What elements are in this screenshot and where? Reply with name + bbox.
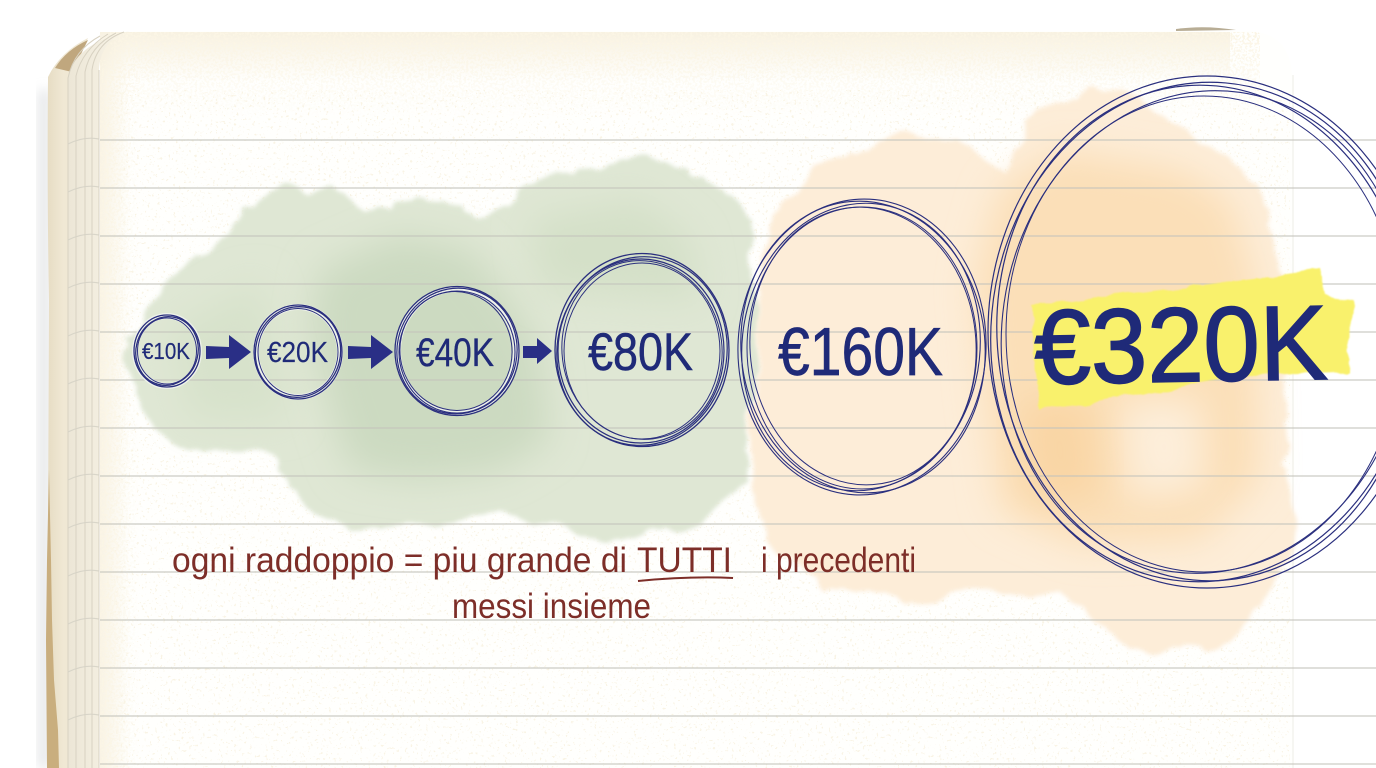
value: €40K	[416, 331, 494, 375]
circle: 160K	[728, 191, 997, 503]
top edge sliver	[1176, 27, 1236, 31]
value: €20K	[267, 337, 329, 369]
circle: 80K	[545, 246, 739, 456]
green wash	[128, 156, 762, 540]
stacked page edges	[68, 31, 130, 768]
orange wash	[748, 88, 1290, 658]
caption line 2: messi insieme	[452, 587, 651, 626]
arrow 3	[523, 338, 552, 364]
watercolor washes	[128, 88, 1290, 658]
circle: 10K	[129, 310, 205, 392]
top paper tint	[100, 32, 1230, 82]
caption	[172, 541, 916, 626]
value: €160K	[778, 314, 943, 390]
caption line 1 end: i precedenti	[761, 541, 916, 580]
value: €80K	[588, 323, 693, 382]
right page margin line	[1292, 75, 1294, 768]
underline	[638, 577, 733, 581]
page shadow	[39, 90, 49, 768]
dense left speckle	[116, 118, 122, 766]
yellow highlight	[1030, 270, 1352, 411]
value: €320K	[1033, 284, 1328, 407]
binding edge	[47, 38, 88, 768]
value: €10K	[142, 338, 191, 364]
worn corner	[55, 40, 88, 72]
circle: 20K	[246, 298, 350, 406]
page edge strokes	[68, 32, 124, 768]
arrow 1	[206, 335, 251, 369]
ruled lines	[68, 138, 1376, 764]
caption line 1 start: ogni raddoppio = piu grande di	[172, 541, 627, 580]
dense top speckle	[130, 32, 1260, 90]
circle: 40K	[385, 277, 529, 425]
TUTTI: TUTTI	[637, 541, 732, 580]
left paper tint	[100, 40, 130, 768]
sparse speckle	[100, 90, 1290, 768]
arrow 2	[348, 335, 393, 369]
worn lower spine	[46, 470, 59, 768]
circle: 320K	[970, 64, 1376, 600]
